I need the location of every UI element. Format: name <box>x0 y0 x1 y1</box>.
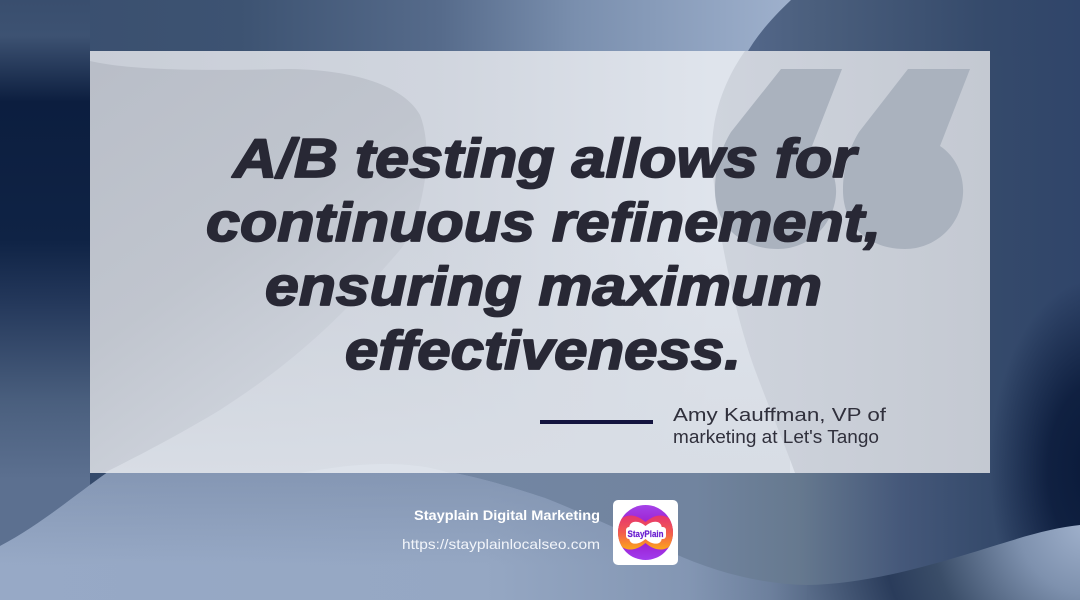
company name: Stayplain Digital Marketing <box>414 508 600 523</box>
icon: StayPlain logo: StayPlain <box>628 529 664 540</box>
attribution <box>673 405 887 447</box>
icon: quotation mark <box>715 69 970 249</box>
attribution: Amy Kauffman, VP of <box>673 405 887 425</box>
panel: quote card <box>90 51 990 473</box>
website url: https://stayplainlocalseo.com <box>402 536 600 552</box>
title: quote text: A/B testing allows for <box>231 127 859 189</box>
title: quote text: effectiveness. <box>345 319 741 381</box>
divider line <box>540 420 653 424</box>
icon: StayPlain logo <box>613 500 678 565</box>
title: quote text: ensuring maximum <box>265 255 822 317</box>
attribution: marketing at Let's Tango <box>673 427 879 447</box>
title: quote text <box>206 127 881 381</box>
title: quote text: continuous refinement, <box>206 191 881 253</box>
